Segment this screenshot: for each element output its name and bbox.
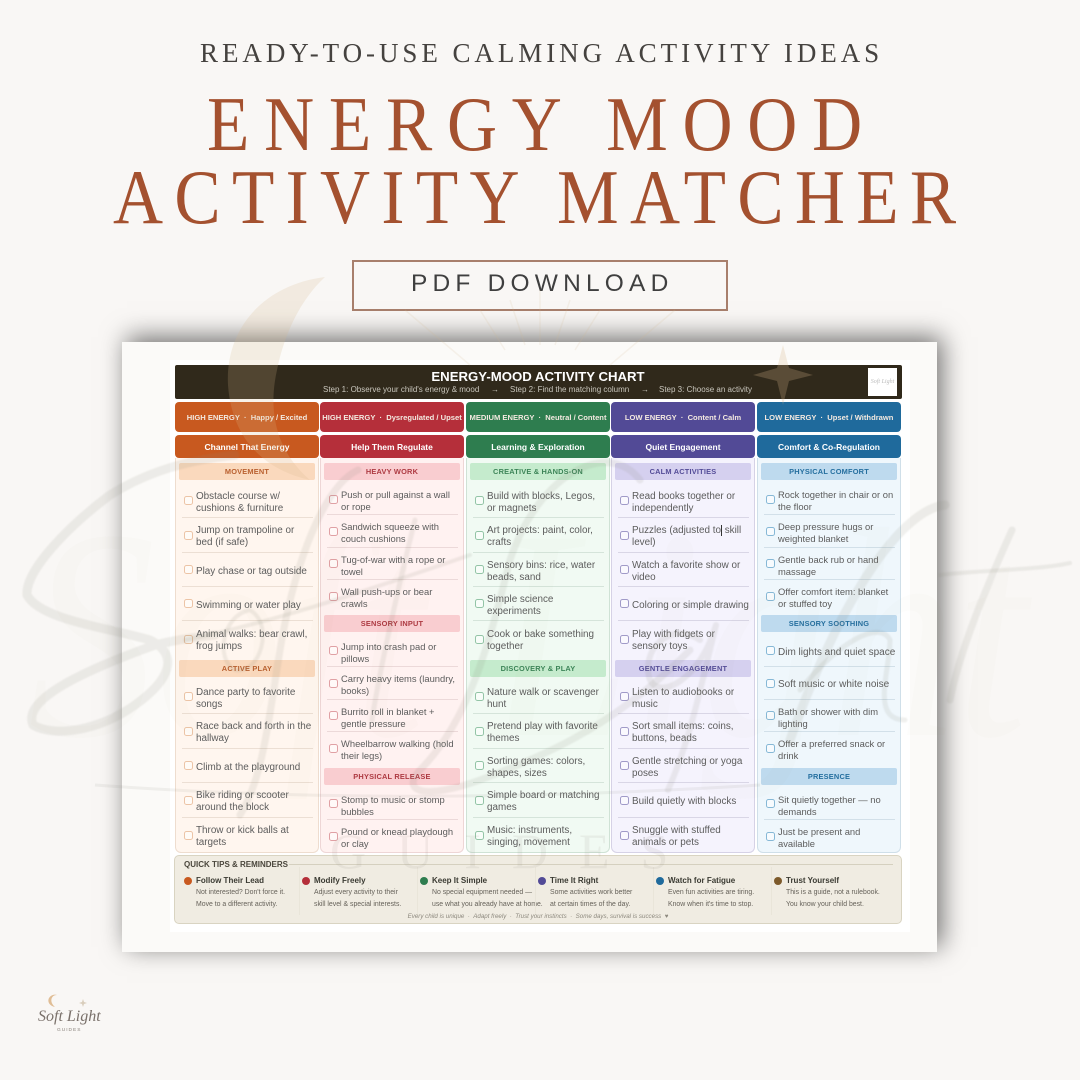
panel: column 2 activities: Carry heavy items (laundry, xyxy=(341,673,455,684)
panel: column 4 activities: Sort small items: coins, xyxy=(632,721,734,732)
panel: column 5 activities xyxy=(757,458,901,853)
section: creative and hands-on: CREATIVE & HANDS-ON xyxy=(493,467,583,476)
panel: column 1 activities: Race back and forth in the xyxy=(196,721,311,732)
panel: column 2 activities: crawls xyxy=(341,598,368,609)
panel: column 5 activities: demands xyxy=(778,806,817,816)
panel: column 5 activities: Deep pressure hugs or xyxy=(778,521,873,532)
section: discovery and play: DISCOVERY & PLAY xyxy=(501,664,575,673)
panel: column 2 activities: pillows xyxy=(341,652,369,664)
PDF download button xyxy=(352,260,728,311)
tip: keep it simple: use what you already have at home. xyxy=(432,901,543,908)
panel: column 3 activities: crafts xyxy=(487,537,511,548)
panel: column 1 activities: Swimming or water play xyxy=(196,600,301,610)
panel: column 3 activities: Pretend play with favorite xyxy=(487,721,598,732)
panel: column 3 activities: beads, sand xyxy=(487,572,541,582)
strategy: channel that energy: Channel That Energy xyxy=(204,442,290,452)
panel: column 4 activities: Play with fidgets or xyxy=(632,629,715,640)
strategy: help them regulate xyxy=(320,435,464,458)
panel: column 5 activities: Offer a preferred snack or xyxy=(778,738,885,749)
panel: column 2 activities: books) xyxy=(341,685,369,696)
panel: column 2 activities: couch cushions xyxy=(341,533,406,544)
section: heavy work: HEAVY WORK xyxy=(366,467,418,476)
panel: column 5 activities: drink xyxy=(778,750,798,761)
panel: column 3 activities: Music: instruments, xyxy=(487,825,572,836)
panel: column 5 activities: Gentle back rub or hand xyxy=(778,554,879,565)
band: low energy content: LOW ENERGY · Content / Calm xyxy=(625,412,741,422)
subtitle heading: READY-TO-USE CALMING ACTIVITY IDEAS xyxy=(200,38,883,68)
panel: column 5 activities: Soft music or white noise xyxy=(778,679,889,690)
section: presence: PRESENCE xyxy=(808,772,850,781)
panel: column 5 activities: Bath or shower with dim xyxy=(778,706,878,717)
panel: column 4 activities: level) xyxy=(632,537,656,548)
panel: column 3 activities: shapes, sizes xyxy=(487,768,547,778)
chart logo box xyxy=(868,368,897,396)
watermark flourish xyxy=(95,785,760,796)
page headings xyxy=(113,38,967,240)
panel: column 1 activities: around the block xyxy=(196,802,269,813)
panel: column 5 activities: massage xyxy=(778,566,816,576)
chart steps: Step 3: Choose an activity xyxy=(659,385,752,394)
panel: column 3 activities: Sensory bins: rice, water xyxy=(487,560,595,570)
panel: column 1 activities: Climb at the playground xyxy=(196,762,300,772)
section: physical comfort: PHYSICAL COMFORT xyxy=(789,467,869,476)
tip: modify freely: Adjust every activity to their xyxy=(314,889,398,896)
watermark guides: GUIDES xyxy=(330,823,699,879)
panel: column 2 activities: towel xyxy=(341,566,363,576)
tip: time it right: at certain times of the day. xyxy=(550,901,630,908)
panel: column 5 activities: weighted blanket xyxy=(778,533,848,544)
panel: column 3 activities: hunt xyxy=(487,698,506,710)
panel: column 4 activities xyxy=(611,458,755,853)
panel: column 1 activities: Jump on trampoline or xyxy=(196,525,294,536)
panel: column 1 activities: Bike riding or scooter xyxy=(196,790,289,801)
band: low energy upset: LOW ENERGY · Upset / Withdrawn xyxy=(765,412,893,422)
panel: column 5 activities: available xyxy=(778,838,815,849)
band: medium energy xyxy=(466,402,610,432)
section: physical release xyxy=(324,768,460,785)
panel: column 5 activities: Dim lights and quiet space xyxy=(778,647,895,658)
chart page xyxy=(170,360,910,932)
strategy: learning and exploration xyxy=(466,435,610,458)
panel: column 4 activities: poses xyxy=(632,768,658,778)
panel: column 1 activities: Obstacle course w/ xyxy=(196,490,280,502)
tip: keep it simple: Keep It Simple xyxy=(432,876,487,885)
section: sensory soothing: SENSORY SOOTHING xyxy=(789,619,869,628)
panel: column 1 activities: hallway xyxy=(196,733,229,744)
title line 2: ACTIVITY MATCHER xyxy=(113,155,967,240)
section: physical comfort xyxy=(761,463,897,480)
tip: trust yourself xyxy=(764,876,882,922)
panel: column 1 activities: frog jumps xyxy=(196,641,242,652)
panel: column 5 activities: lighting xyxy=(778,718,808,728)
panel: column 4 activities: video xyxy=(632,572,656,582)
chart header bar xyxy=(175,365,902,399)
band: high energy dysregulated: HIGH ENERGY · Dysregulated / Upset xyxy=(322,412,462,422)
tip: watch for fatigue: Even fun activities are tiring. xyxy=(668,889,754,896)
band: high energy happy: HIGH ENERGY · Happy / Excited xyxy=(187,412,307,422)
tip: watch for fatigue: Know when it's time to stop. xyxy=(668,901,753,908)
panel: column 3 activities: together xyxy=(487,641,523,652)
panel: column 2 activities: Burrito roll in blanket + xyxy=(341,706,435,717)
section: discovery and play xyxy=(470,660,606,677)
strategy: help them regulate: Help Them Regulate xyxy=(351,442,433,452)
panel: column 5 activities: Offer comfort item: blanket xyxy=(778,586,888,597)
panel: column 5 activities: Sit quietly together — no xyxy=(778,794,881,805)
section: active play xyxy=(179,660,315,677)
logo moon xyxy=(48,995,57,1007)
tip: trust yourself: You know your child best. xyxy=(786,901,864,908)
section: movement: MOVEMENT xyxy=(225,467,269,476)
panel: column 1 activities: Throw or kick balls at xyxy=(196,825,289,836)
section: physical release: PHYSICAL RELEASE xyxy=(353,772,431,781)
footer logo xyxy=(38,994,101,1033)
panel: column 4 activities: Snuggle with stuffed xyxy=(632,825,721,836)
section: movement xyxy=(179,463,315,480)
strategy: quiet engagement xyxy=(611,435,755,458)
tips heading: QUICK TIPS & REMINDERS xyxy=(184,860,288,869)
panel: column 4 activities: Puzzles (adjusted to skill xyxy=(632,525,741,536)
panel: column 4 activities: animals or pets xyxy=(632,837,699,848)
PDF download button: PDF DOWNLOAD xyxy=(411,270,674,297)
panel: column 1 activities: Play chase or tag outside xyxy=(196,566,307,576)
panel: column 4 activities: buttons, beads xyxy=(632,733,697,744)
tip: follow their lead xyxy=(184,876,285,908)
panel: column 4 activities: music xyxy=(632,698,658,710)
panel: column 2 activities: or clay xyxy=(341,838,369,849)
panel: column 4 activities: independently xyxy=(632,502,694,514)
panel: column 3 activities: Sorting games: colors, xyxy=(487,756,585,766)
panel: column 2 activities: Stomp to music or stomp xyxy=(341,794,445,805)
panel: column 4 activities: sensory toys xyxy=(632,641,687,652)
chart steps: Step 2: Find the matching column xyxy=(510,385,629,394)
chart steps: → xyxy=(641,385,649,394)
chart steps xyxy=(323,385,752,394)
band: high energy dysregulated xyxy=(320,402,464,432)
panel: column 2 activities: Wheelbarrow walking (hold xyxy=(341,738,454,749)
tip: follow their lead: Not interested? Don't force it. xyxy=(196,889,285,896)
tip: time it right: Time It Right xyxy=(550,876,598,885)
panel: column 5 activities: Just be present and xyxy=(778,826,860,837)
panel: column 4 activities: Listen to audiobooks or xyxy=(632,686,734,698)
strategy: learning and exploration: Learning & Exploration xyxy=(491,442,585,452)
strategy: quiet engagement: Quiet Engagement xyxy=(645,442,721,452)
tip: trust yourself: This is a guide, not a rulebook. xyxy=(786,889,880,896)
strategy: channel that energy xyxy=(175,435,319,458)
section: presence xyxy=(761,768,897,785)
watermark moon xyxy=(228,277,325,480)
panel: column 3 activities: themes xyxy=(487,733,519,744)
section: creative and hands-on xyxy=(470,463,606,480)
panel: column 3 activities xyxy=(466,458,610,853)
panel: column 2 activities: their legs) xyxy=(341,750,382,761)
tip: keep it simple xyxy=(410,876,528,922)
tip: modify freely: Modify Freely xyxy=(314,876,366,885)
panel: quick tips xyxy=(174,855,902,924)
section: sensory input: SENSORY INPUT xyxy=(361,619,423,628)
strategy: comfort and co-regulation: Comfort & Co-Regulation xyxy=(778,442,880,452)
logo wordmark: Soft Light xyxy=(38,1008,101,1025)
tip: modify freely xyxy=(292,876,410,922)
panel: column 3 activities: Simple science xyxy=(487,594,553,604)
panel: column 1 activities: bed (if safe) xyxy=(196,537,248,548)
tip: watch for fatigue xyxy=(646,876,764,922)
tip: time it right xyxy=(528,876,646,922)
panel: column 2 activities: or rope xyxy=(341,501,371,512)
tip: watch for fatigue: Watch for Fatigue xyxy=(668,876,735,885)
tips footer note: Every child is unique · Adapt freely · Trust your instincts · Some days, survival is success ♥ xyxy=(408,913,668,920)
band: low energy content xyxy=(611,402,755,432)
tip: trust yourself: Trust Yourself xyxy=(786,876,839,885)
chart logo box: Soft Light xyxy=(871,379,894,385)
band: low energy upset xyxy=(757,402,901,432)
panel: column 3 activities: Simple board or matching xyxy=(487,790,600,801)
panel: column 4 activities: Coloring or simple drawing xyxy=(632,600,749,610)
section: sensory input xyxy=(324,615,460,632)
strategy: comfort and co-regulation xyxy=(757,435,901,458)
panel: column 3 activities: Art projects: paint, color, xyxy=(487,525,593,536)
chart preview card xyxy=(122,342,937,952)
tip: time it right: Some activities work better xyxy=(550,889,632,896)
logo guides text: GUIDES xyxy=(57,1027,81,1033)
watermark swashes xyxy=(27,455,1070,815)
chart steps: → xyxy=(491,385,499,394)
panel: column 1 activities: targets xyxy=(196,837,226,848)
watermark wordmark: Soft Light xyxy=(28,469,1036,801)
panel: column 1 activities: cushions & furniture xyxy=(196,502,283,514)
panel: column 5 activities: the floor xyxy=(778,501,812,512)
tip: modify freely: skill level & special interests. xyxy=(314,901,401,908)
band: high energy happy xyxy=(175,402,319,432)
panel: column 4 activities: Watch a favorite show or xyxy=(632,560,740,570)
panel: column 4 activities: Gentle stretching or yoga xyxy=(632,756,742,766)
section: calm activities xyxy=(615,463,751,480)
panel: column 2 activities xyxy=(320,458,464,853)
panel: column 4 activities: Read books together or xyxy=(632,490,735,502)
section: calm activities: CALM ACTIVITIES xyxy=(650,467,716,476)
panel: column 3 activities: Cook or bake something xyxy=(487,629,594,640)
panel: column 3 activities: games xyxy=(487,802,517,813)
section: gentle engagement: GENTLE ENGAGEMENT xyxy=(639,664,727,673)
panel: column 4 activities: Build quietly with blocks xyxy=(632,796,736,807)
panel: column 2 activities: Sandwich squeeze with xyxy=(341,521,439,532)
panel: column 3 activities: experiments xyxy=(487,606,541,616)
panel: column 2 activities: Pound or knead playdough xyxy=(341,826,453,837)
panel: column 3 activities: Nature walk or scavenger xyxy=(487,686,599,698)
watermark sun rays xyxy=(405,290,675,365)
panel: column 3 activities: singing, movement xyxy=(487,837,570,848)
panel: column 2 activities: Tug-of-war with a rope or xyxy=(341,554,445,565)
section: active play: ACTIVE PLAY xyxy=(222,664,272,673)
section: gentle engagement xyxy=(615,660,751,677)
logo star xyxy=(79,999,87,1007)
panel: column 3 activities: Build with blocks, Legos, xyxy=(487,490,595,502)
panel: column 2 activities: bubbles xyxy=(341,806,374,816)
panel: column 2 activities: Push or pull against a wall xyxy=(341,489,450,500)
section: sensory soothing xyxy=(761,615,897,632)
title line 1: ENERGY MOOD xyxy=(207,82,877,167)
panel: column 3 activities: or magnets xyxy=(487,502,536,514)
panel: column 2 activities: gentle pressure xyxy=(341,718,406,728)
tip: follow their lead: Move to a different activity. xyxy=(196,901,277,908)
panel: column 2 activities: Jump into crash pad or xyxy=(341,641,436,652)
watermark star xyxy=(753,345,813,405)
panel: column 1 activities: Animal walks: bear crawl, xyxy=(196,629,307,640)
chart title: ENERGY-MOOD ACTIVITY CHART xyxy=(431,369,645,384)
band: medium energy: MEDIUM ENERGY · Neutral / Content xyxy=(470,412,606,422)
tip: follow their lead: Follow Their Lead xyxy=(196,876,264,885)
panel: column 1 activities: songs xyxy=(196,698,222,710)
panel: column 2 activities: Wall push-ups or bear xyxy=(341,586,432,597)
panel: column 1 activities: Dance party to favorite xyxy=(196,686,295,698)
panel: column 1 activities xyxy=(175,458,319,853)
panel: column 5 activities: Rock together in chair or on xyxy=(778,489,893,500)
tip: keep it simple: No special equipment needed — xyxy=(432,889,532,896)
chart steps: Step 1: Observe your child's energy & mood xyxy=(323,385,479,394)
section: heavy work xyxy=(324,463,460,480)
panel: column 5 activities: or stuffed toy xyxy=(778,598,832,609)
